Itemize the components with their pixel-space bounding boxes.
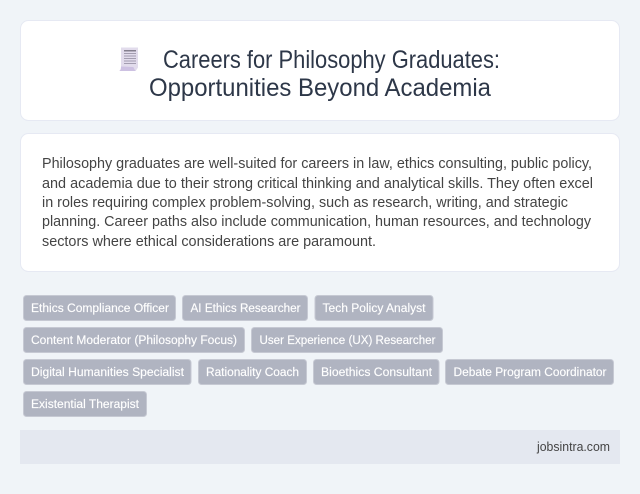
tag: User Experience (UX) Researcher (252, 328, 442, 352)
tag: Debate Program Coordinator (446, 360, 614, 384)
tag: Content Moderator (Philosophy Focus): Content Moderator (Philosophy Focus) (31, 333, 237, 347)
paragraph line 4: planning. Career paths also include communication, human resources, and technology (42, 214, 592, 230)
tag: Digital Humanities Specialist: Digital Humanities Specialist (31, 365, 185, 379)
tag: AI Ethics Researcher (182, 296, 308, 320)
tag: Tech Policy Analyst: Tech Policy Analyst (322, 301, 426, 315)
tag: Content Moderator (Philosophy Focus) (24, 328, 244, 352)
panel: title header (20, 20, 620, 120)
tag: Digital Humanities Specialist (24, 360, 191, 384)
tag: Existential Therapist: Existential Therapist (31, 397, 140, 411)
tag: Debate Program Coordinator: Debate Program Coordinator (454, 365, 606, 379)
heading line 2: Opportunities Beyond Academia (149, 75, 491, 102)
tag: Bioethics Consultant (314, 360, 439, 384)
heading line 1: Careers for Philosophy Graduates: (163, 47, 500, 74)
footer bar (20, 430, 620, 464)
tag: Ethics Compliance Officer (24, 296, 176, 320)
tag: Ethics Compliance Officer: Ethics Compliance Officer (31, 301, 169, 315)
paragraph line 1: Philosophy graduates are well-suited for careers in law, ethics consulting, public policy, (42, 156, 592, 172)
paragraph line 3: in roles requiring complex problem-solving, such as research, writing, and strategic (42, 195, 568, 211)
tag: Bioethics Consultant: Bioethics Consultant (321, 365, 433, 379)
footer source text: jobsintra.com (536, 439, 610, 454)
paragraph line 2: and academia due to their strong critical thinking and analytical skills. They often excel (42, 176, 593, 192)
tag: Rationality Coach: Rationality Coach (206, 365, 299, 379)
tag: Rationality Coach (198, 360, 306, 384)
tag: User Experience (UX) Researcher: User Experience (UX) Researcher (260, 333, 436, 347)
tag: Tech Policy Analyst (315, 296, 433, 320)
tag: Existential Therapist (24, 392, 146, 416)
tag: AI Ethics Researcher: AI Ethics Researcher (190, 301, 300, 315)
icon: scroll document (119, 48, 138, 71)
paragraph line 5: sectors where ethical considerations are paramount. (42, 234, 376, 250)
panel: summary paragraph (20, 134, 620, 272)
